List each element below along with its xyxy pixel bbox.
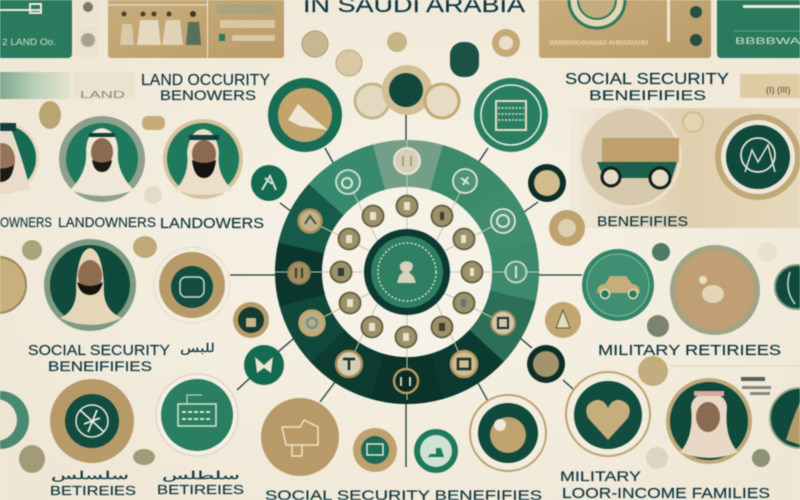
icon: dark gold badge xyxy=(528,164,566,202)
portrait: left partial xyxy=(0,120,39,195)
panel: top left green card: 2 LAND Oo. xyxy=(2,37,56,47)
icon: plant badge xyxy=(251,165,287,201)
ring segments xyxy=(254,119,560,425)
icon: heart badge xyxy=(566,372,650,456)
icon: care badge xyxy=(470,395,546,471)
text rows xyxy=(217,4,275,41)
icon: tan arrow coin xyxy=(545,302,581,338)
labels: retirees: سلطلس xyxy=(162,470,240,482)
heading: land security: LAND OCCURITY xyxy=(141,72,270,89)
panel: top tan seal card xyxy=(539,0,711,58)
panel: land band: LAND xyxy=(80,90,125,101)
divider label line xyxy=(670,365,800,367)
labels: landowners row: OWNERS xyxy=(0,214,52,230)
heading: land security xyxy=(141,72,270,103)
panel: top left green card xyxy=(0,0,72,58)
labels: landowners row xyxy=(0,214,264,232)
icon: people group xyxy=(120,11,201,45)
icon: butterfly badge xyxy=(244,345,284,385)
center medallion xyxy=(364,229,450,315)
heading: land security: BENOWERS xyxy=(160,87,256,103)
heading: social security lower left: SOCIAL SECURITY xyxy=(28,342,170,359)
portrait: landowner right xyxy=(163,119,243,199)
portrait: military xyxy=(666,378,752,464)
portrait: lower right partial xyxy=(770,388,800,448)
icon: right partial badge xyxy=(775,265,800,309)
panel: top tan people card xyxy=(108,0,284,58)
icon: lock badge xyxy=(233,302,269,338)
labels: landowners row: LANDOWNERS xyxy=(58,214,156,230)
panel: top right green card xyxy=(717,0,800,58)
labels: retirees: BETIREIES xyxy=(157,482,244,497)
icon: document tan xyxy=(261,398,339,476)
icon: car badge xyxy=(582,249,654,321)
heading: social security lower left: BENEIFIFIES xyxy=(48,358,152,374)
heading: military low income: MILITARY xyxy=(560,468,642,484)
portrait: landowner center xyxy=(59,116,145,202)
small tokens right xyxy=(638,315,669,469)
icon: dark chart badge xyxy=(715,114,800,200)
panel: right beige backdrop xyxy=(570,108,800,228)
icon: bed badge xyxy=(414,429,458,473)
icon: tablet badge xyxy=(154,247,230,323)
outer ring nodes xyxy=(288,148,526,393)
labels: retirees: BETIREIES xyxy=(50,483,136,498)
heading: social security top right: BENEIFIFIES xyxy=(589,87,706,103)
heading: social security top right xyxy=(565,71,729,103)
portrait: lower left partial xyxy=(0,391,29,449)
labels: retirees xyxy=(50,470,244,498)
tag: top right tan xyxy=(740,74,800,98)
small tan tokens xyxy=(39,101,777,262)
labels: landowners row: LANDOWERS xyxy=(160,215,264,232)
panel: land band xyxy=(0,72,135,101)
heading: military retirees: MILITARY RETIRIEES xyxy=(598,342,781,359)
icon: office chart xyxy=(156,374,238,456)
icon: seal xyxy=(569,0,625,28)
connector lines xyxy=(230,112,582,467)
small top icons around wheel xyxy=(302,29,520,118)
heading: military low income xyxy=(560,468,770,500)
labels: retirees: سلسلس xyxy=(51,470,129,482)
heading: social security lower left: للبس xyxy=(180,341,215,355)
portrait: social security xyxy=(44,239,136,331)
icon: left gold coin xyxy=(0,257,26,313)
inner white disc xyxy=(322,187,492,357)
icon: landslide medallion xyxy=(268,78,342,152)
small tokens lower left xyxy=(19,445,155,473)
text: small notes right xyxy=(741,377,771,395)
icon: dark number badge xyxy=(527,345,565,383)
panel: top tan seal card: WMMARKHHAWAR AHMARIAHM xyxy=(549,40,648,47)
heading: social security lower left xyxy=(28,341,215,374)
icon: tan coin xyxy=(549,210,585,246)
inner node glyphs xyxy=(338,202,474,341)
panel: pattern tiles xyxy=(74,0,99,57)
chart: central wheel xyxy=(254,119,560,425)
panel: top right green card: BBBBWA xyxy=(735,36,800,46)
outer node glyphs xyxy=(296,156,516,386)
icon: building xyxy=(474,78,548,152)
small tokens row two xyxy=(22,236,201,262)
small token lower right xyxy=(752,449,770,467)
icon: tan coins medallion xyxy=(670,245,760,335)
tag: top right tan: (I) (III) xyxy=(766,85,790,95)
heading: social security top right: SOCIAL SECURITY xyxy=(565,71,729,88)
icon: truck xyxy=(580,107,680,207)
text: benefits top right: BENEFIFIES xyxy=(597,213,688,229)
icon: card badge xyxy=(353,428,397,472)
spokes xyxy=(275,140,540,400)
inner ring nodes xyxy=(330,196,482,348)
icon: running figure xyxy=(50,379,134,463)
